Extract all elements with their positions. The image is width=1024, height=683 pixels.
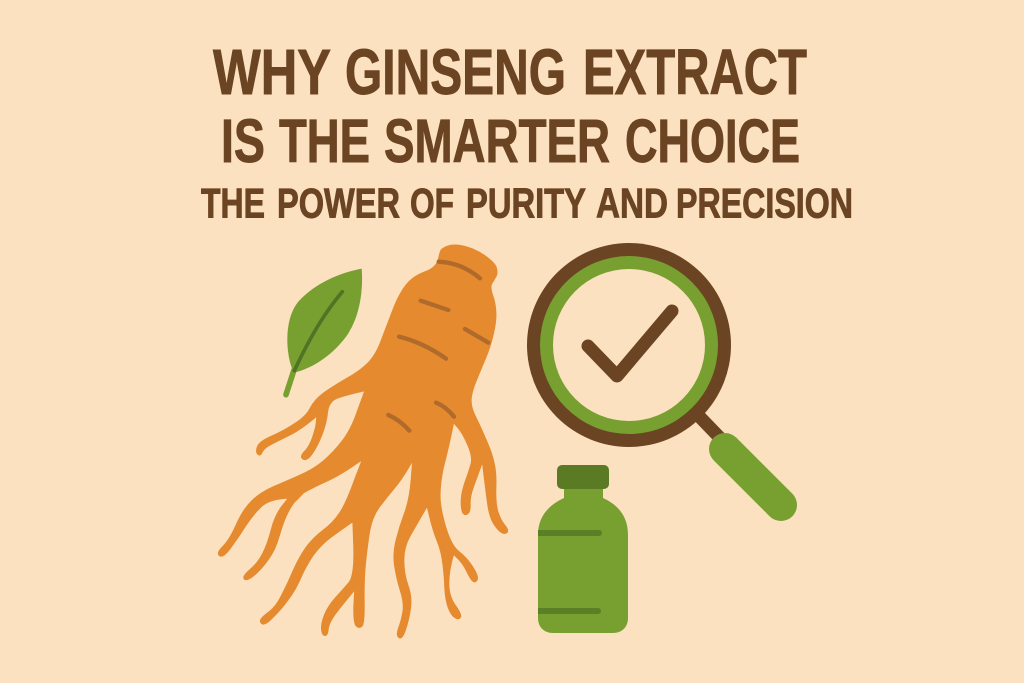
- subtitle: PRECISION: [676, 180, 853, 227]
- subtitle: OF: [410, 180, 454, 227]
- title line 2: SMARTER: [384, 107, 610, 175]
- title line 2: IS: [221, 107, 265, 175]
- title line 2: CHOICE: [625, 107, 800, 175]
- icon: leaf: [286, 269, 362, 395]
- title line 2: [221, 107, 800, 175]
- title line 1: GINSENG: [345, 36, 566, 108]
- subtitle: [201, 180, 853, 227]
- subtitle: PURITY: [466, 180, 586, 227]
- icon: magnifying glass with check: [527, 243, 781, 505]
- title line 1: EXTRACT: [583, 36, 807, 108]
- title line 2: THE: [279, 107, 370, 175]
- subtitle: THE: [201, 180, 265, 227]
- root creases: [388, 262, 488, 431]
- icon: ginseng root: [219, 245, 507, 637]
- subtitle: POWER: [277, 180, 400, 227]
- icon: supplement bottle: [538, 465, 628, 633]
- title line 1: [213, 36, 807, 108]
- title line 1: WHY: [213, 36, 331, 108]
- subtitle: AND: [596, 180, 668, 227]
